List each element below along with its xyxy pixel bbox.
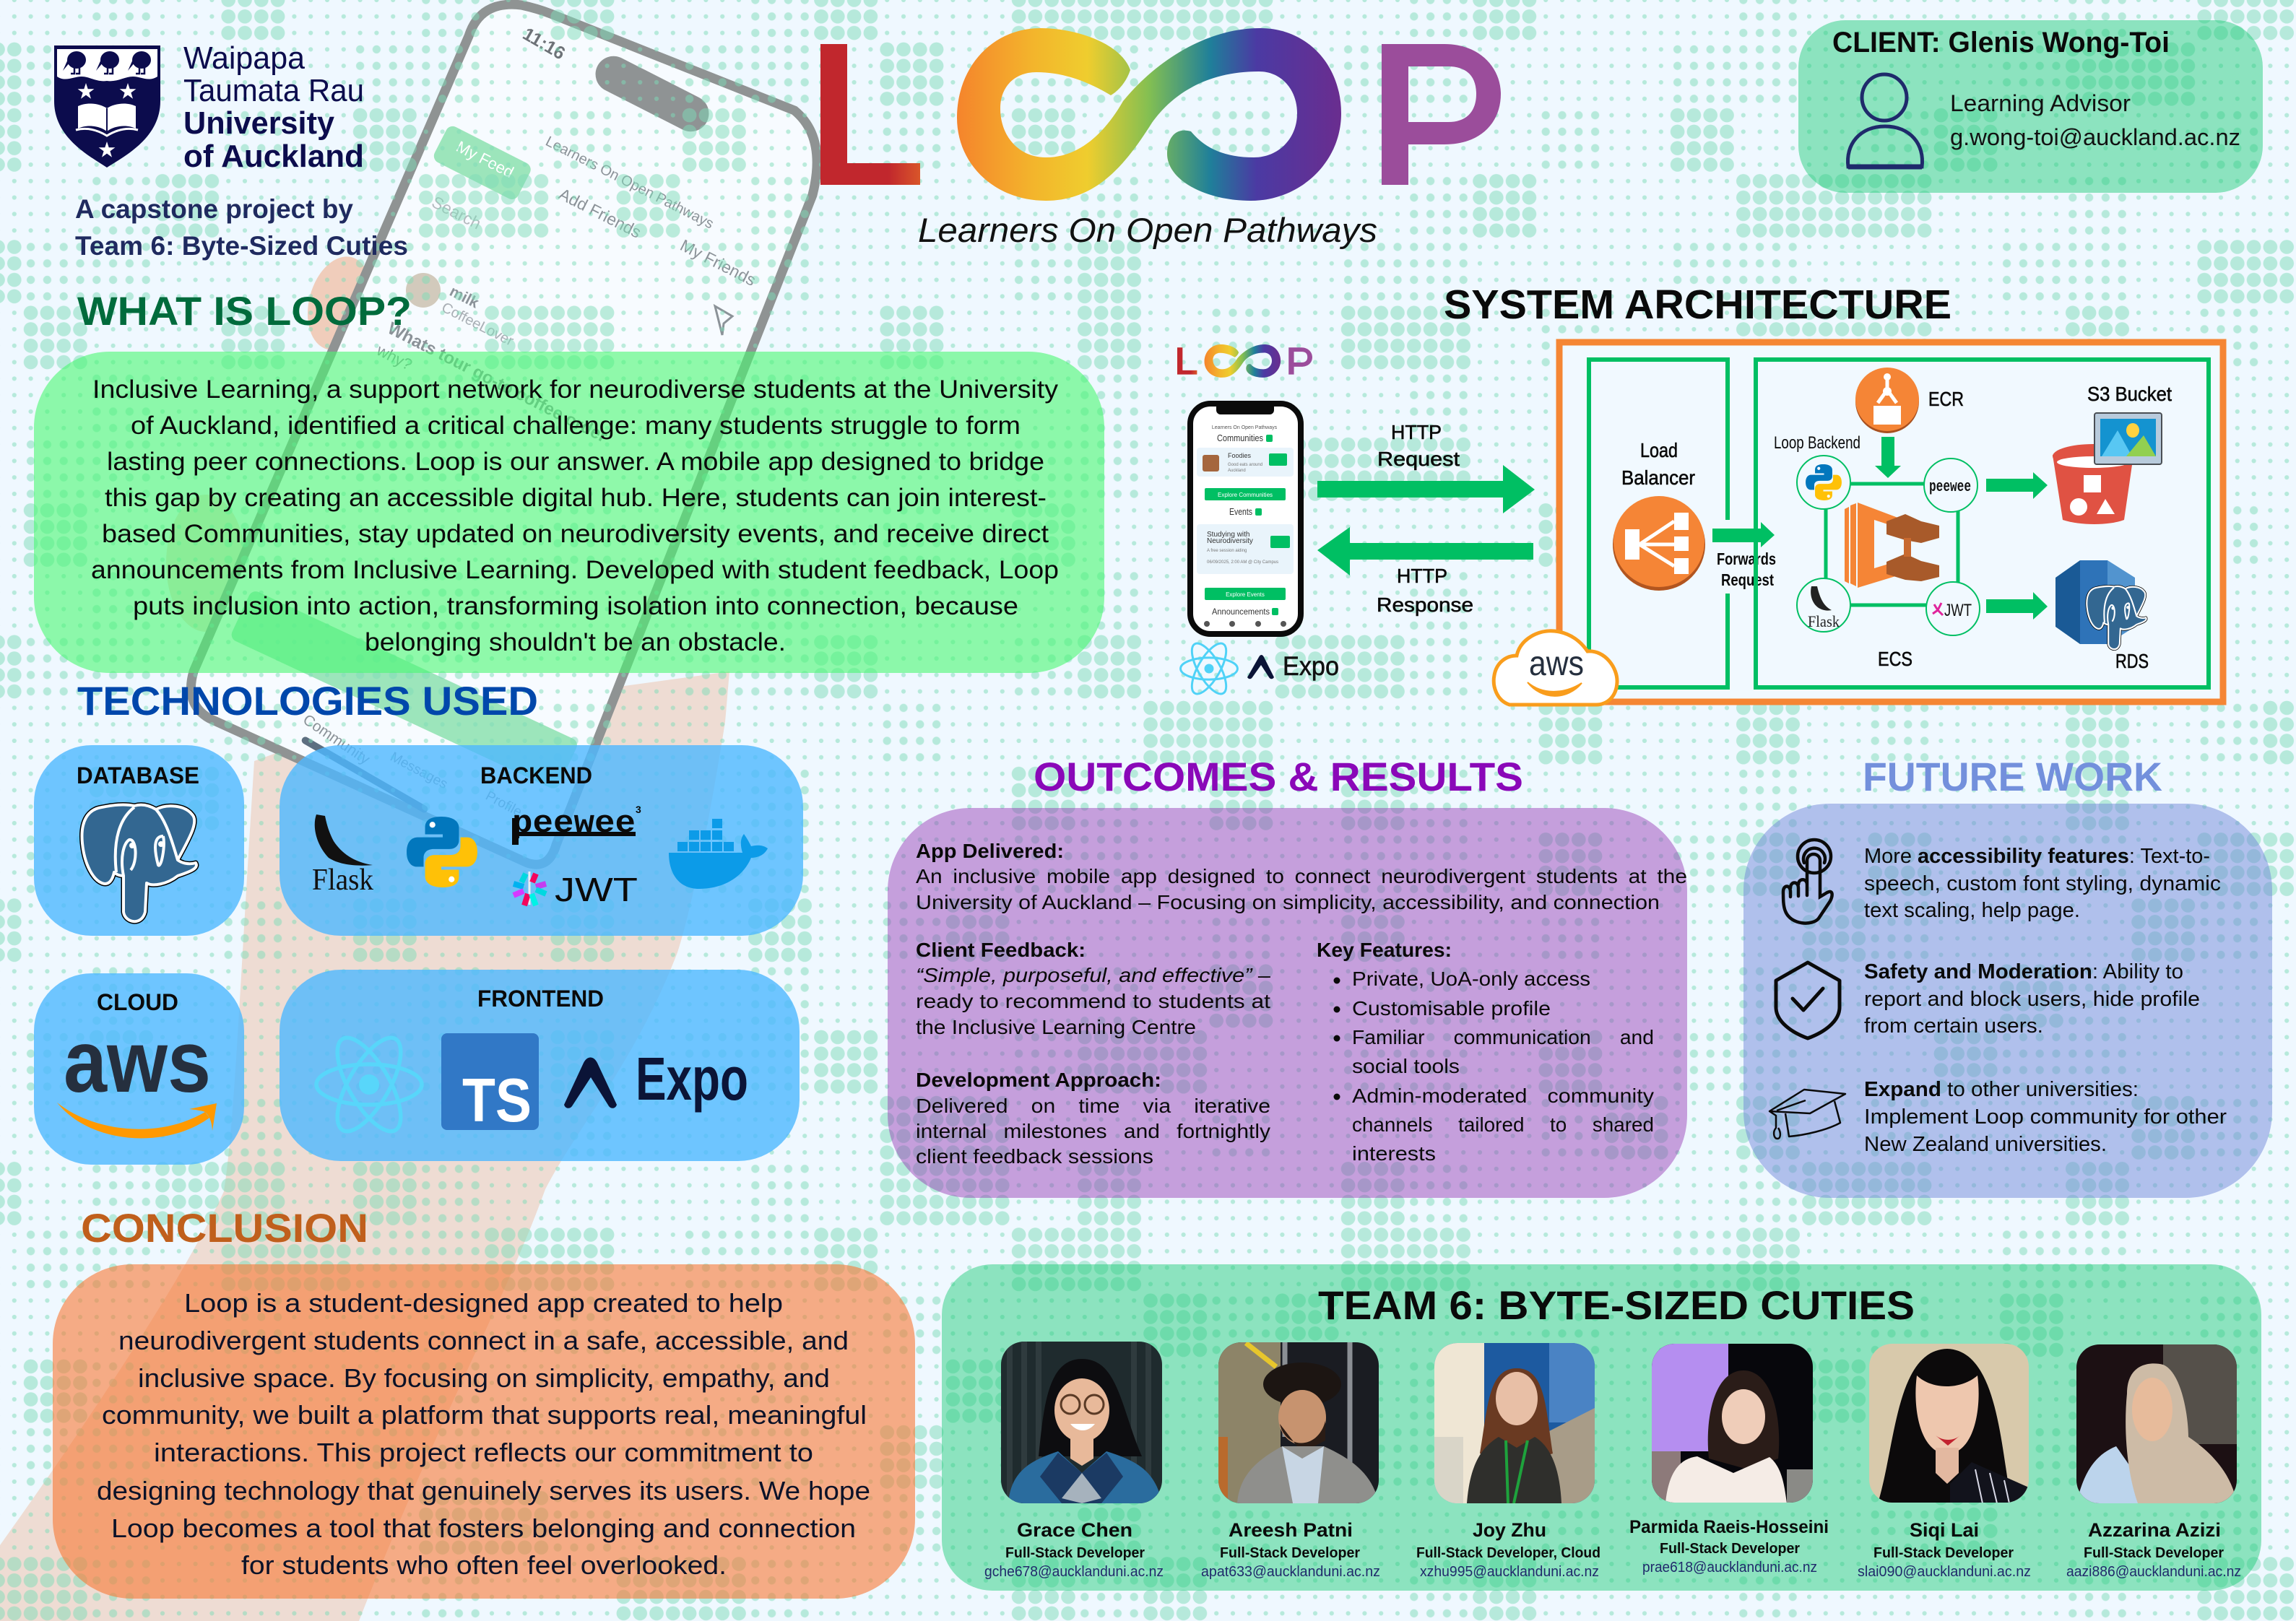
icon: jwt xyxy=(514,871,638,908)
team member: Parmida Raeis-Hosseini xyxy=(1629,1344,1829,1576)
block: development approach: internal milestones and fortnightly xyxy=(916,1120,1270,1142)
phone mockup: 06/09/2025, 2:00 AM @ City Campus xyxy=(1207,560,1278,565)
icon: ecr xyxy=(1855,368,1919,433)
item: expand: Expand to other universities: xyxy=(1864,1078,2139,1101)
phone mockup: Explore Events xyxy=(1226,591,1265,598)
block: development approach: client feedback sessions xyxy=(916,1145,1153,1168)
item: accessibility: speech, custom font styling, dynamic xyxy=(1864,872,2221,895)
s3 bucket xyxy=(1986,383,2172,524)
block: key features: channels tailored to shared xyxy=(1352,1113,1654,1136)
item: accessibility: text scaling, help page. xyxy=(1864,899,2080,922)
panel: conclusion: designing technology that genuinely serves its users. We hope xyxy=(97,1476,870,1505)
team member: Grace Chen: Full-Stack Developer xyxy=(1005,1545,1145,1561)
team member: Areesh Patni xyxy=(1201,1342,1380,1580)
icon: typescript xyxy=(441,1033,539,1135)
panel: frontend: FRONTEND xyxy=(477,986,604,1012)
heading: system architecture: SYSTEM ARCHITECTURE xyxy=(1444,282,1951,328)
arrow: http request: Request xyxy=(1377,448,1460,470)
panel: backend: BACKEND xyxy=(480,762,592,788)
icon: touch hand xyxy=(1783,840,1832,924)
icon: flask node xyxy=(1797,578,1850,632)
load balancer box: Load xyxy=(1640,439,1678,461)
panel: what is loop xyxy=(34,352,1104,673)
arrow: http response xyxy=(1317,527,1533,616)
team member: Joy Zhu: Full-Stack Developer, Cloud xyxy=(1416,1545,1600,1561)
panel: outcomes and results xyxy=(888,808,1687,1198)
rds xyxy=(1986,560,2149,672)
arrow: forwards request: Request xyxy=(1721,570,1774,589)
icon: jwt node xyxy=(1926,582,1980,635)
university name: University xyxy=(183,105,335,141)
ecs box: ECR xyxy=(1928,388,1964,410)
university logo xyxy=(54,40,364,174)
item: safety xyxy=(1864,960,2200,1038)
description text: based Communities, stay updated on neurodiversity events, and receive direct xyxy=(102,520,1049,548)
team member: Joy Zhu: Joy Zhu xyxy=(1473,1519,1546,1541)
phone mockup: Foodies xyxy=(1228,452,1252,459)
university name xyxy=(183,40,364,174)
phone mockup: Good eats around xyxy=(1228,463,1262,467)
team member: Parmida Raeis-Hosseini: Full-Stack Developer xyxy=(1660,1541,1800,1557)
phone screen content: milk xyxy=(447,283,482,312)
icon: python node xyxy=(1797,456,1850,509)
rds: RDS xyxy=(2115,650,2149,672)
icon: react xyxy=(316,1029,422,1140)
icon: docker whale xyxy=(669,819,768,889)
letter L xyxy=(820,44,920,185)
react and expo logos xyxy=(1181,638,1339,699)
panel: conclusion: Loop becomes a tool that fosters belonging and connection xyxy=(111,1513,856,1543)
phone screen content: My Friends xyxy=(677,235,759,290)
icon: expo xyxy=(564,1045,748,1113)
team member: Parmida Raeis-Hosseini: Parmida Raeis-Hosseini xyxy=(1629,1517,1829,1537)
phone mockup: A free session aiding xyxy=(1207,549,1247,553)
icon: graduation cap xyxy=(1769,1090,1845,1139)
icon: jwt node: JWT xyxy=(1944,601,1972,620)
phone screen content: Messages xyxy=(388,749,450,792)
block: app delivered: App Delivered: xyxy=(916,840,1064,862)
phone mockup: Communities xyxy=(1217,433,1263,443)
icon: typescript: TS xyxy=(462,1066,532,1135)
description text: this gap by creating an accessible digital hub. Here, students can join interest- xyxy=(105,484,1047,512)
block: key features: social tools xyxy=(1352,1055,1460,1077)
team member: Azzarina Azizi: Azzarina Azizi xyxy=(2088,1519,2221,1541)
phone screen content: Whats tour go-to coffee order xyxy=(384,318,610,446)
item: accessibility xyxy=(1864,845,2221,922)
heading: outcomes and results: OUTCOMES & RESULTS xyxy=(1034,754,1523,799)
block: key features: Admin-moderated community xyxy=(1352,1085,1654,1107)
icon: flask node: Flask xyxy=(1808,612,1840,630)
client details xyxy=(1950,90,2240,150)
team member: Azzarina Azizi: Full-Stack Developer xyxy=(2084,1545,2224,1561)
item: expand: New Zealand universities. xyxy=(1864,1133,2107,1156)
arrow: http request xyxy=(1317,421,1535,513)
icon: shield check xyxy=(1776,962,1840,1038)
heading: conclusion: CONCLUSION xyxy=(81,1205,368,1251)
description text: belonging shouldn't be an obstacle. xyxy=(365,628,786,656)
team member: Areesh Patni: Full-Stack Developer xyxy=(1220,1545,1360,1561)
icon: jwt: JWT xyxy=(555,871,638,908)
phone mockup: Events xyxy=(1229,506,1252,517)
aws region frame xyxy=(1559,342,2223,702)
panel: cloud: CLOUD xyxy=(97,989,178,1015)
description text: of Auckland, identified a critical challenge: many students struggle to form xyxy=(131,412,1021,440)
block: client feedback: ready to recommend to students at xyxy=(916,990,1270,1012)
heading: technologies used: TECHNOLOGIES USED xyxy=(77,678,538,723)
shield crest xyxy=(54,45,160,168)
panel: backend xyxy=(280,745,803,936)
item: expand xyxy=(1864,1078,2227,1156)
icon: aws cloud xyxy=(1494,631,1617,705)
item: safety: report and block users, hide profile xyxy=(1864,988,2200,1011)
panel: cloud xyxy=(34,973,244,1165)
team member: Grace Chen: gche678@aucklanduni.ac.nz xyxy=(984,1564,1164,1580)
phone body xyxy=(191,4,817,864)
block: client feedback: “Simple, purposeful, and effective” – xyxy=(916,964,1270,986)
panel: conclusion: interactions. This project reflects our commitment to xyxy=(154,1438,813,1467)
team member: Siqi Lai: slai090@aucklanduni.ac.nz xyxy=(1858,1564,2031,1580)
arrow: http response: Response xyxy=(1377,594,1473,616)
team member: Siqi Lai: Siqi Lai xyxy=(1910,1519,1979,1541)
item: safety: Safety and Moderation: Ability to xyxy=(1864,960,2183,983)
panel: conclusion: inclusive space. By focusing on simplicity, empathy, and xyxy=(138,1363,830,1393)
panel: frontend xyxy=(280,970,800,1161)
phone screen content: My Feed xyxy=(454,137,516,181)
infinity symbol xyxy=(957,28,1341,201)
item: safety: from certain users. xyxy=(1864,1014,2043,1038)
team member: Grace Chen xyxy=(984,1342,1164,1580)
team member: Areesh Patni: Areesh Patni xyxy=(1229,1519,1353,1541)
block: key features: interests xyxy=(1352,1142,1436,1165)
team member: Siqi Lai: Full-Stack Developer xyxy=(1873,1545,2014,1561)
panel: conclusion: community, we built a platform that supports real, meaningful xyxy=(102,1400,867,1430)
loop logo xyxy=(820,28,1501,201)
block: key features xyxy=(1317,939,1654,1165)
phone mockup: Learners On Open Pathways xyxy=(1212,425,1278,430)
phone mockup: Auckland xyxy=(1228,469,1246,473)
university name: Taumata Rau xyxy=(183,73,364,108)
arrow: to rds xyxy=(1986,592,2048,620)
small loop logo xyxy=(1177,344,1312,378)
block: key features: Private, UoA-only access xyxy=(1352,968,1590,990)
letter P xyxy=(1382,44,1501,185)
phone mockup: Announcements xyxy=(1212,607,1270,617)
background photo: hand holding phone xyxy=(0,4,817,1621)
panel: team xyxy=(942,1264,2261,1591)
phone screen content: Community xyxy=(300,711,373,768)
icon: flask xyxy=(312,814,373,897)
item: expand: Implement Loop community for other xyxy=(1864,1105,2227,1129)
phone screen content: Profile xyxy=(483,788,524,820)
s3 bucket: S3 Bucket xyxy=(2087,383,2172,405)
icon: ecs cluster xyxy=(1845,503,1939,588)
description text: puts inclusion into action, transforming isolation into connection, because xyxy=(133,592,1018,620)
block: key features: Key Features: xyxy=(1317,939,1452,961)
block: key features: Customisable profile xyxy=(1352,997,1551,1020)
description text: announcements from Inclusive Learning. Developed with student feedback, Loop xyxy=(91,556,1059,584)
team member: Azzarina Azizi: aazi886@aucklanduni.ac.nz xyxy=(2066,1564,2241,1580)
service ring xyxy=(1826,484,1958,605)
description text xyxy=(91,375,1059,656)
icon: postgresql elephant xyxy=(82,805,196,921)
capstone byline: A capstone project by xyxy=(75,194,353,224)
arrow: ecr to service xyxy=(1875,437,1901,478)
ecs box: Loop Backend xyxy=(1774,433,1860,453)
capstone byline xyxy=(75,194,408,261)
phone screen content: 11:16 xyxy=(519,24,568,64)
panel: conclusion: Loop is a student-designed app created to help xyxy=(184,1288,783,1318)
block: development approach xyxy=(916,1069,1270,1168)
ecs box: ECS xyxy=(1878,648,1912,670)
block: app delivered: An inclusive mobile app designed to connect neurodivergent students at the xyxy=(916,865,1687,887)
phone screen content xyxy=(229,24,759,820)
client details: g.wong-toi@auckland.ac.nz xyxy=(1950,124,2240,150)
phone mockup xyxy=(1190,403,1301,634)
phone screen content: Learners On Open Pathways xyxy=(543,134,716,232)
load balancer box xyxy=(1589,360,1728,687)
panel: client xyxy=(1798,20,2263,193)
description text: lasting peer connections. Loop is our answer. A mobile app designed to bridge xyxy=(107,448,1044,476)
university name: of Auckland xyxy=(183,139,364,174)
panel: future work xyxy=(1743,804,2272,1198)
icon: expo: Expo xyxy=(636,1045,748,1113)
heading: future work: FUTURE WORK xyxy=(1863,754,2162,799)
icon: load balancer xyxy=(1613,496,1705,591)
hand and forearm xyxy=(0,249,729,1621)
block: app delivered xyxy=(916,840,1687,913)
icon: python xyxy=(407,817,477,887)
university name: Waipapa xyxy=(183,40,306,76)
block: development approach: Delivered on time via iterative xyxy=(916,1095,1270,1117)
load balancer box: Balancer xyxy=(1621,466,1695,489)
team member: Joy Zhu xyxy=(1416,1343,1600,1580)
panel: conclusion xyxy=(53,1264,915,1599)
panel: database: DATABASE xyxy=(77,762,199,788)
item: accessibility: More accessibility features: Text-to- xyxy=(1864,845,2210,868)
system architecture diagram xyxy=(1177,342,2223,705)
icon: flask: Flask xyxy=(312,864,373,897)
block: app delivered: University of Auckland – Focusing on simplicity, accessibility, and connection xyxy=(916,891,1660,913)
phone mockup: Explore Communities xyxy=(1218,492,1273,498)
description text: Inclusive Learning, a support network for neurodiverse students at the University xyxy=(92,375,1059,404)
arrow: http response: HTTP xyxy=(1397,565,1447,587)
arrow: forwards request xyxy=(1712,520,1776,594)
team member: Azzarina Azizi xyxy=(2066,1344,2241,1580)
team member: Siqi Lai xyxy=(1858,1344,2031,1580)
icon: image xyxy=(2094,413,2162,464)
block: client feedback xyxy=(916,939,1270,1038)
panel: conclusion: for students who often feel overlooked. xyxy=(241,1550,727,1580)
team member: Parmida Raeis-Hosseini: prae618@aucklanduni.ac.nz xyxy=(1642,1560,1817,1576)
phone screen content: why? xyxy=(373,341,415,374)
capstone byline: Team 6: Byte-Sized Cuties xyxy=(75,231,408,261)
team member: Grace Chen: Grace Chen xyxy=(1017,1519,1132,1541)
heading: what is loop: WHAT IS LOOP? xyxy=(77,288,412,334)
icon: peewee: 3 xyxy=(636,804,641,815)
phone screen content: Search xyxy=(429,192,484,233)
arrow: forwards request: Forwards xyxy=(1717,549,1776,568)
team member: Joy Zhu: xzhu995@aucklanduni.ac.nz xyxy=(1420,1564,1599,1580)
client name: CLIENT: Glenis Wong-Toi xyxy=(1832,27,2170,58)
block: development approach: Development Approach: xyxy=(916,1069,1161,1091)
ecs box xyxy=(1756,360,2209,687)
team member: Areesh Patni: apat633@aucklanduni.ac.nz xyxy=(1201,1564,1380,1580)
phone mockup: Studying with xyxy=(1207,531,1249,539)
icon: peewee: peewee xyxy=(512,806,636,842)
panel: conclusion: neurodivergent students connect in a safe, accessible, and xyxy=(118,1326,849,1355)
icon: aws cloud: aws xyxy=(1529,645,1584,683)
icon: peewee node xyxy=(1924,459,1977,512)
panel: database xyxy=(34,745,244,936)
react and expo logos: Expo xyxy=(1283,651,1339,681)
icon: person xyxy=(1847,74,1923,167)
arrow: to s3 xyxy=(1986,472,2048,499)
block: client feedback: the Inclusive Learning Centre xyxy=(916,1016,1196,1038)
phone screen content: CoffeeLover xyxy=(439,300,516,349)
icon: aws: aws xyxy=(64,1012,211,1111)
phone screen content: Add Friends xyxy=(556,184,644,242)
icon: peewee node: peewee xyxy=(1929,478,1971,496)
team heading: TEAM 6: BYTE-SIZED CUTIES xyxy=(1318,1282,1915,1328)
client details: Learning Advisor xyxy=(1950,90,2131,116)
arrow: http request: HTTP xyxy=(1391,421,1442,443)
block: client feedback: Client Feedback: xyxy=(916,939,1086,961)
subtitle: Learners On Open Pathways xyxy=(918,211,1377,249)
phone mockup: Neurodiversity xyxy=(1207,537,1253,545)
block: key features: Familiar communication and xyxy=(1352,1026,1654,1048)
